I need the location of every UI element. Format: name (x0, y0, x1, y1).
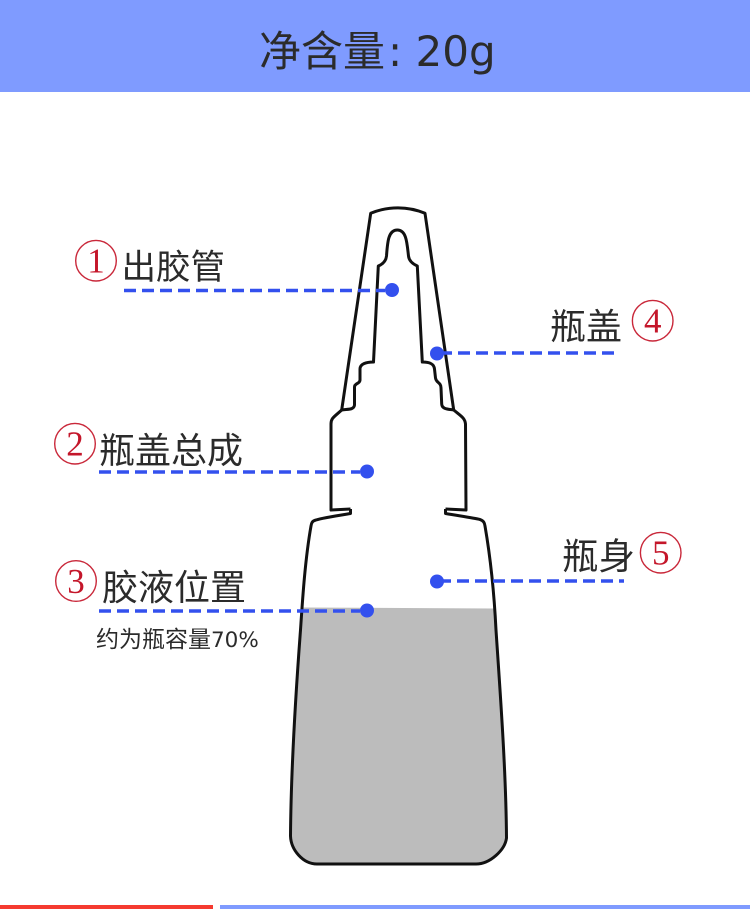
callout 4: 瓶盖: 4 (644, 302, 661, 340)
callout 3: 胶液位置: 3 (67, 562, 85, 601)
glue liquid fill (290, 608, 506, 864)
nozzle tube outline (342, 230, 454, 410)
callout 4: 瓶盖: 瓶盖 (550, 307, 622, 348)
callout 3: 胶液位置 (56, 561, 374, 653)
cap collar outline (331, 410, 466, 510)
bottle body outline (290, 509, 506, 864)
title: 净含量: 20g (259, 27, 496, 76)
callout 5: 瓶身: 5 (652, 534, 669, 572)
footer bars (0, 905, 750, 909)
header banner (0, 0, 750, 92)
callout 1: 出胶管: 1 (87, 242, 105, 280)
callout 4: 瓶盖 (430, 300, 673, 360)
callout 2: 瓶盖总成: 瓶盖总成 (99, 431, 243, 472)
callout 5: 瓶身: 瓶身 (562, 535, 635, 578)
callout 5: 瓶身 (430, 532, 681, 588)
callout 2: 瓶盖总成 (55, 423, 374, 478)
note: fill ratio: 约为瓶容量70% (96, 627, 259, 653)
callout 2: 瓶盖总成: 2 (66, 424, 84, 464)
callout 1: 出胶管: 出胶管 (122, 248, 225, 288)
callout 3: 胶液位置: 胶液位置 (102, 568, 246, 609)
bottle diagram (290, 208, 506, 864)
callout 1: 出胶管 (76, 240, 399, 297)
cap outer outline (342, 208, 454, 410)
